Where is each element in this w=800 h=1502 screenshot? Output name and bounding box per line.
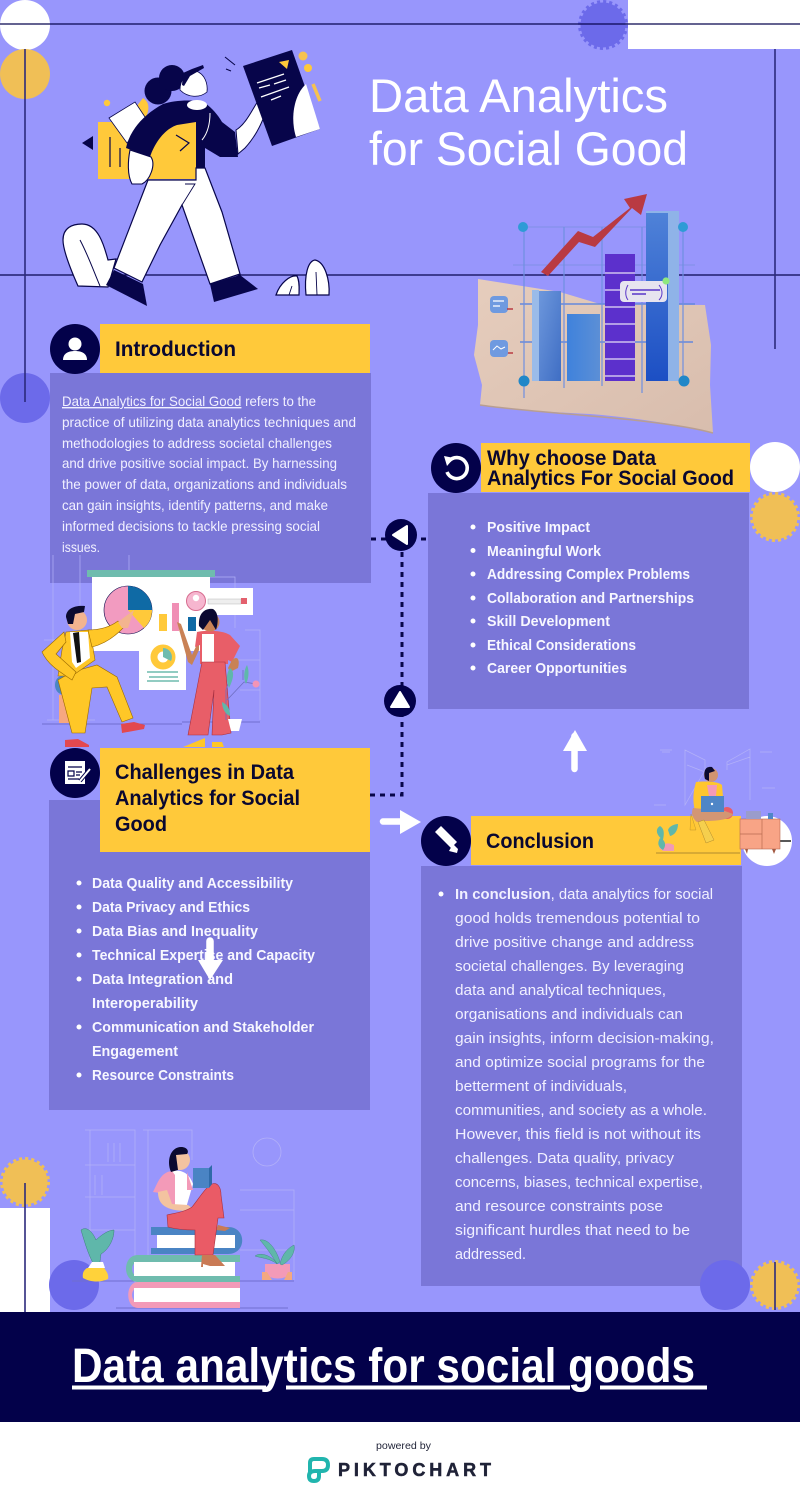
introduction body text: the power of data, organizations and individuals — [62, 476, 347, 492]
icon: refresh — [431, 443, 481, 493]
illustration: woman carrying folder and document — [63, 50, 329, 306]
panel: conclusion — [421, 866, 742, 1286]
introduction body text: practice of utilizing data analytics techniques and — [62, 414, 356, 430]
title — [369, 69, 688, 175]
conclusion body text: societal challenges. By leveraging — [455, 958, 684, 975]
panel: why choose — [428, 493, 749, 709]
list: reasons: Addressing Complex Problems — [487, 566, 690, 583]
heading: challenges: Challenges in Data — [115, 761, 294, 784]
introduction body text: methodologies to address societal challenges — [62, 435, 332, 451]
arrow: up — [563, 730, 587, 769]
heading: challenges: Good — [115, 813, 167, 836]
heading: why choose: Why choose Data — [487, 447, 656, 470]
heading: conclusion: Conclusion — [486, 830, 594, 853]
introduction body text: informed decisions to tackle pressing social — [62, 518, 320, 534]
illustration: two people presenting charts — [42, 555, 260, 747]
list: reasons — [473, 519, 694, 677]
introduction body text: issues. — [62, 539, 100, 555]
list: challenges: Interoperability — [92, 995, 199, 1012]
footer branding: powered by Piktochart: PIKTOCHART — [338, 1460, 491, 1480]
conclusion body text: In conclusion, data analytics for social — [455, 886, 713, 903]
arrow: right — [383, 810, 421, 834]
conclusion body text: gain insights, inform decision-making, — [455, 1030, 714, 1047]
heading: conclusion — [471, 816, 741, 865]
icon: pencil — [421, 816, 471, 866]
list: challenges — [79, 875, 316, 1084]
list: reasons: Skill Development — [487, 613, 610, 630]
list: challenges: Communication and Stakeholder — [92, 1019, 314, 1036]
conclusion body text: communities, and society as a whole. — [455, 1102, 707, 1119]
arrow: down — [198, 941, 223, 980]
conclusion body text: drive positive change and address — [455, 934, 694, 951]
connector: dotted path with navigation nodes — [370, 519, 428, 795]
conclusion body text: concerns, biases, technical expertise, — [455, 1174, 703, 1191]
icon: form with pen — [50, 748, 100, 798]
footer banner: Data analytics for social goods — [72, 1340, 695, 1393]
list: reasons: Positive Impact — [487, 519, 590, 536]
list: reasons: Collaboration and Partnerships — [487, 590, 694, 607]
introduction body text: can gain insights, identify patterns, and make — [62, 497, 328, 513]
list: challenges: Data Bias and Inequality — [92, 923, 259, 940]
list: challenges: Resource Constraints — [92, 1067, 234, 1084]
heading: why choose: Analytics For Social Good — [487, 467, 734, 490]
footer branding: powered by Piktochart — [0, 1422, 800, 1502]
heading: introduction: Introduction — [115, 338, 236, 361]
illustration: woman with laptop on desk — [654, 749, 780, 854]
introduction body text: Data Analytics for Social Good refers to the — [62, 393, 316, 409]
list: reasons: Career Opportunities — [487, 660, 627, 677]
conclusion body text: and resource constraints pose — [455, 1198, 663, 1215]
icon: Piktochart logo — [309, 1459, 328, 1481]
panel: challenges — [49, 800, 370, 1110]
title: Data Analytics — [369, 69, 668, 122]
list: challenges: Data Integration and — [92, 971, 233, 988]
conclusion body text: betterment of individuals, — [455, 1078, 627, 1095]
list: reasons: Meaningful Work — [487, 543, 602, 560]
conclusion body text: However, this field is not without its — [455, 1126, 701, 1143]
presenter: woman in red outfit — [177, 609, 240, 747]
list: challenges: Engagement — [92, 1043, 178, 1060]
introduction body text — [62, 393, 356, 555]
list: challenges: Data Quality and Accessibility — [92, 875, 294, 892]
heading: challenges — [100, 748, 370, 852]
conclusion body text — [438, 886, 714, 1263]
list: challenges: Data Privacy and Ethics — [92, 899, 250, 916]
footer banner — [0, 1312, 800, 1422]
conclusion body text: organisations and individuals can — [455, 1006, 683, 1023]
illustration: woman reading on stack of books — [72, 1130, 294, 1308]
introduction body text: and drive positive social impact. By harnessing — [62, 455, 337, 471]
decorative blue circle over conclusion panel — [700, 1260, 750, 1310]
panel: introduction — [50, 373, 371, 583]
list: challenges: Technical Expertise and Capacity — [92, 947, 316, 964]
list: reasons: Ethical Considerations — [487, 637, 636, 654]
conclusion body text: challenges. Data quality, privacy — [455, 1150, 675, 1167]
heading: introduction — [100, 324, 370, 373]
illustration: 3D bar chart with rising arrow — [474, 194, 713, 433]
conclusion body text: significant hurdles that need to be — [455, 1222, 690, 1239]
potted plant — [222, 665, 260, 731]
conclusion body text: and optimize social programs for the — [455, 1054, 705, 1071]
conclusion body text: addressed. — [455, 1246, 526, 1263]
presenter: man in yellow suit — [42, 606, 145, 747]
icon: person — [50, 324, 100, 374]
heading: why choose — [481, 443, 750, 492]
conclusion body text: data and analytical techniques, — [455, 982, 666, 999]
conclusion body text: good holds tremendous potential to — [455, 910, 700, 927]
heading: challenges: Analytics for Social — [115, 787, 300, 810]
footer branding: powered by Piktochart: powered by — [376, 1440, 432, 1452]
title: for Social Good — [369, 122, 688, 175]
